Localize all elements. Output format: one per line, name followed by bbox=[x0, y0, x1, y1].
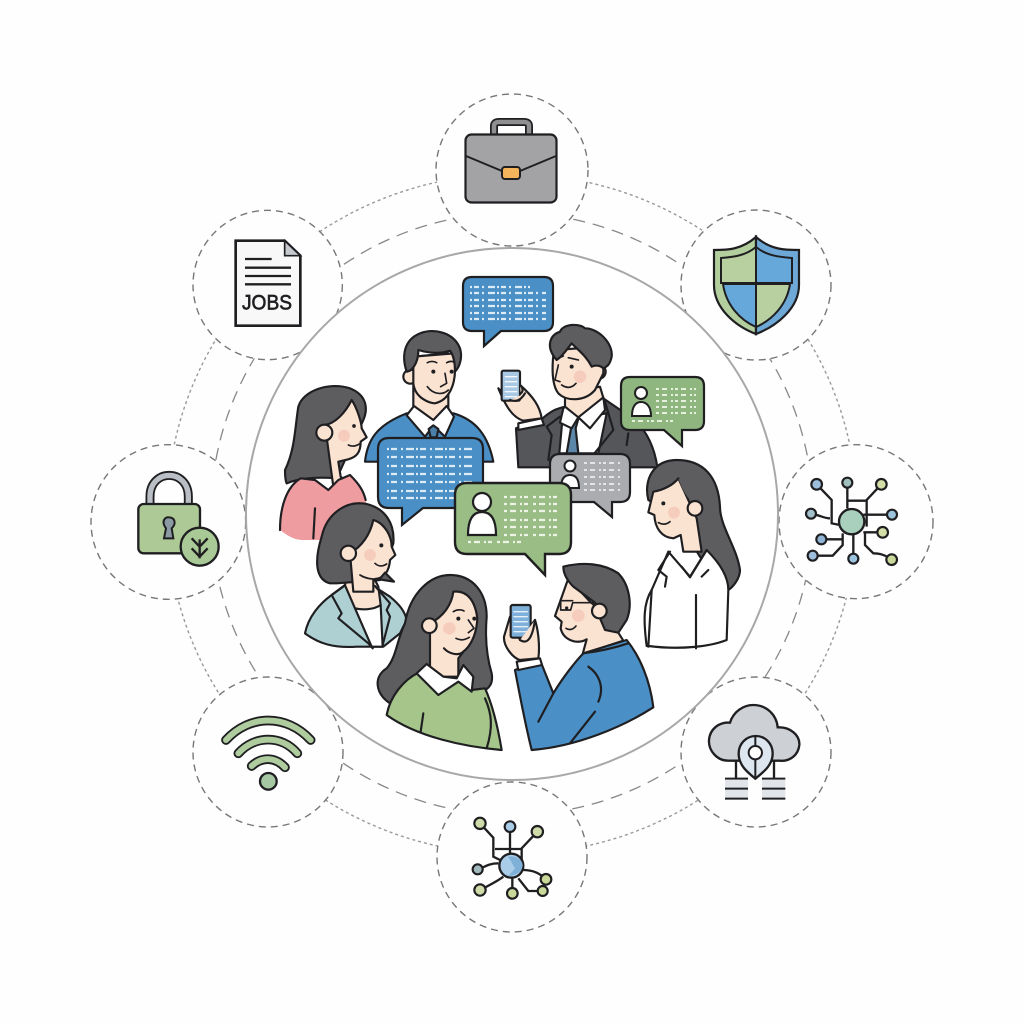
icon circle: lock bbox=[91, 445, 246, 599]
person: man in dark suit with phone bbox=[498, 325, 657, 467]
person: man in blue sweater bbox=[365, 331, 493, 462]
icon circle: briefcase bbox=[436, 94, 588, 246]
speech bubble: gray with avatar bbox=[550, 454, 630, 517]
person: woman in pink bbox=[280, 386, 370, 540]
speech bubble: blue top bbox=[463, 277, 553, 346]
icon circle: jobs document bbox=[193, 210, 342, 360]
speech bubble: green center with avatar bbox=[455, 483, 571, 575]
icon circle: wifi bbox=[193, 677, 343, 827]
icon circle: cloud bbox=[681, 677, 831, 827]
text: JOBS: JOBS bbox=[242, 290, 292, 315]
icon circle: circuit network right bbox=[779, 445, 933, 599]
icon circle: shield bbox=[681, 210, 831, 360]
person: woman in white blouse bbox=[645, 460, 740, 648]
speech bubble: green right with avatar bbox=[621, 377, 704, 446]
icon circle: hub network bottom bbox=[437, 782, 587, 932]
person: woman in teal jacket bbox=[305, 503, 407, 648]
person: woman in green sweater bbox=[378, 575, 502, 750]
person: man in blue jacket with glasses and phone bbox=[504, 564, 653, 750]
central circle bbox=[246, 248, 778, 780]
speech bubble: blue middle bbox=[378, 438, 483, 525]
